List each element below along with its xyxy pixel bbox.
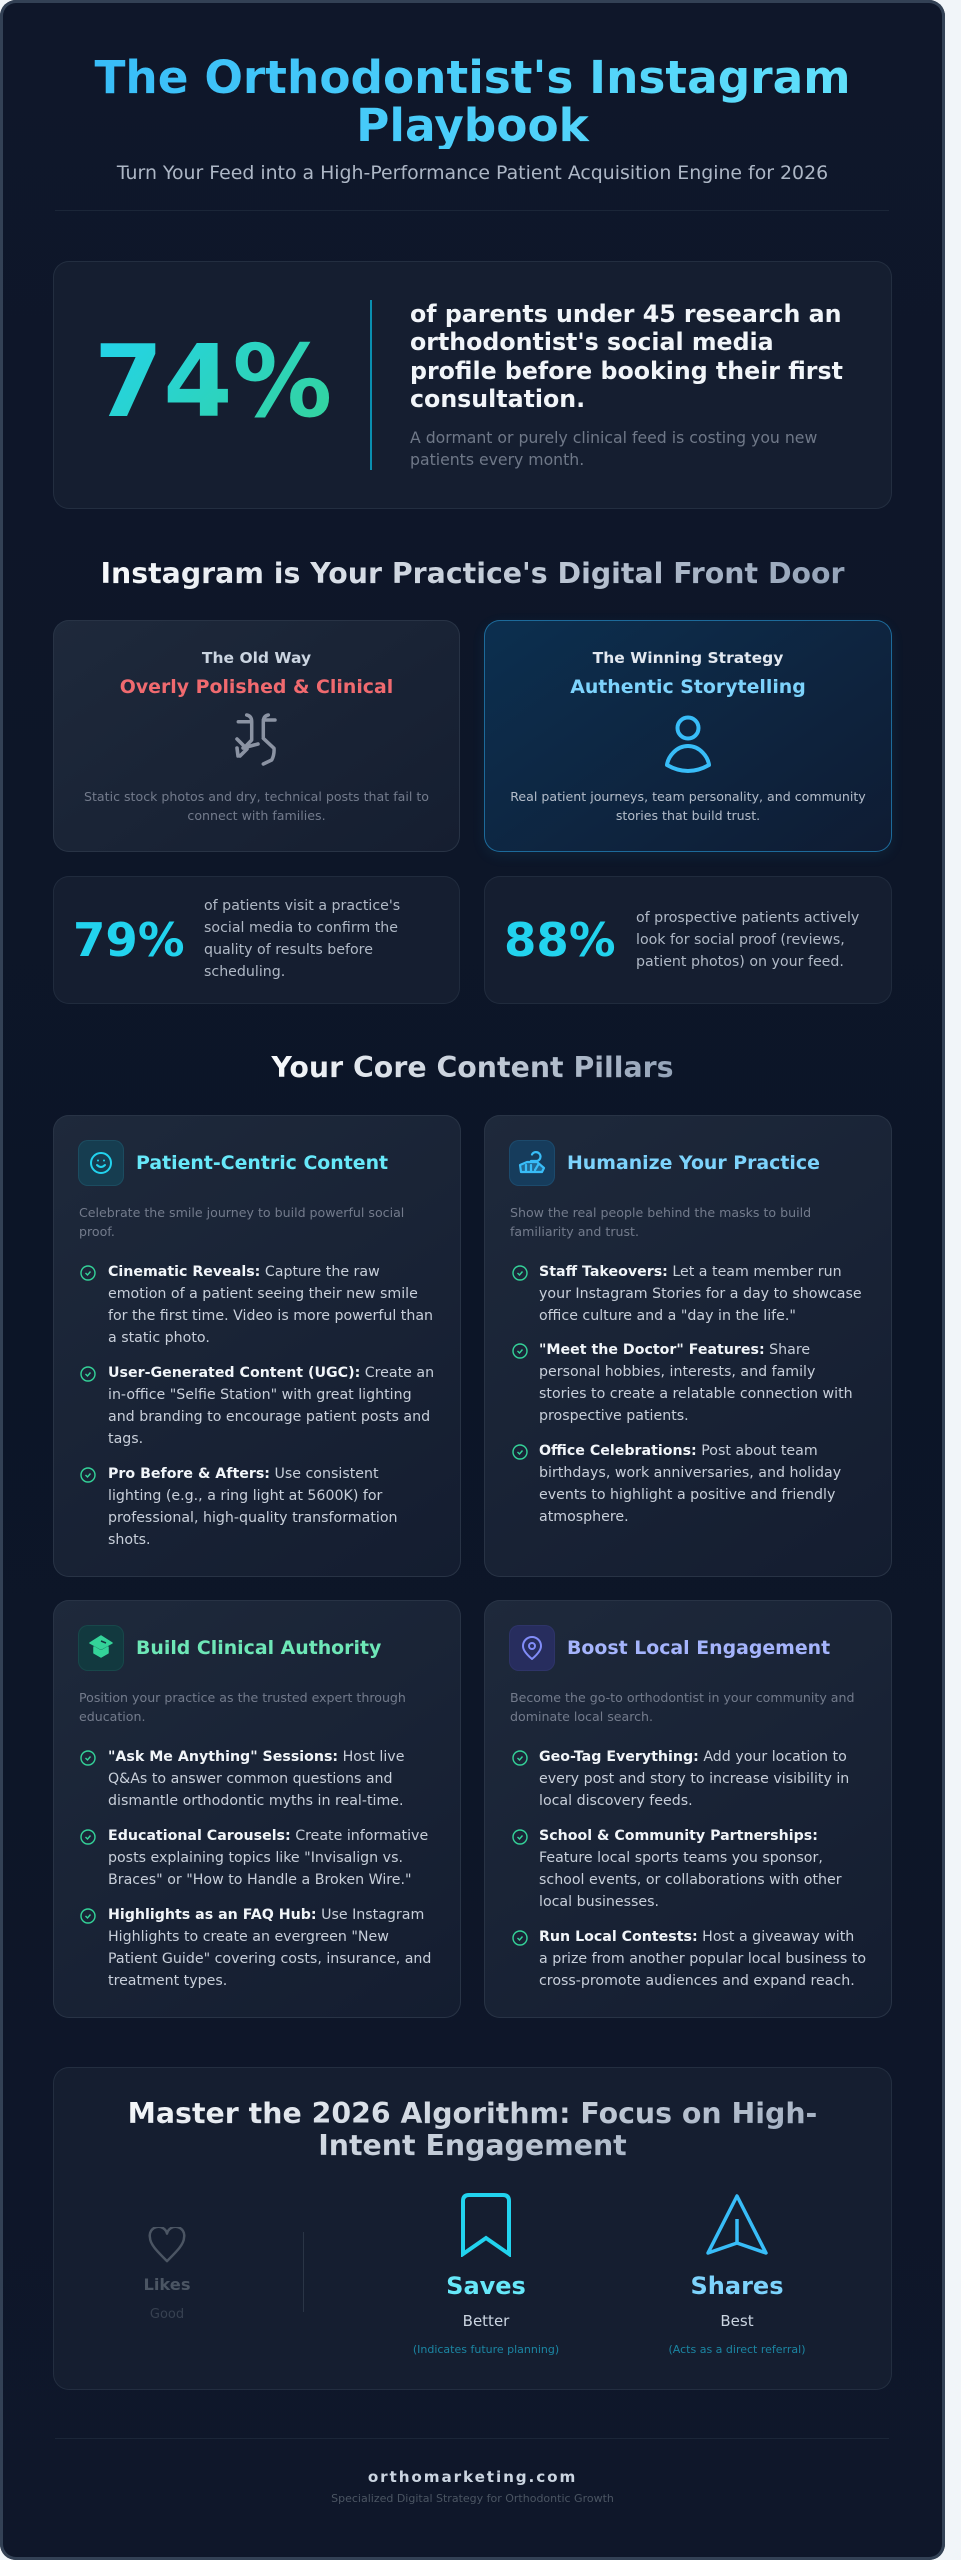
text: scheduling. <box>204 964 285 980</box>
description: Static stock photos and dry, technical posts that fail to <box>84 789 429 804</box>
pillar description: dominate local search. <box>510 1709 653 1724</box>
likes label: Likes <box>143 2275 191 2294</box>
panel: algorithm <box>53 2067 892 2390</box>
pillar title: Humanize Your Practice <box>567 1152 820 1174</box>
text: of patients visit a practice's <box>204 898 400 914</box>
title: The Orthodontist's Instagram <box>94 51 851 104</box>
subtitle: Turn Your Feed into a High-Performance Patient Acquisition Engine for 2026 <box>117 162 828 184</box>
hero statement: consultation. <box>410 385 585 413</box>
pillar description: familiarity and trust. <box>510 1224 639 1239</box>
item: carousels: Educational Carousels: Create informative <box>108 1828 428 1844</box>
pillar description: education. <box>79 1709 146 1724</box>
pillar description: Celebrate the smile journey to build powerful social <box>79 1205 404 1220</box>
item: highlights <box>108 1907 431 1989</box>
panel: stat 88% <box>484 876 892 1004</box>
icon: bookmark <box>461 2193 511 2257</box>
description: connect with families. <box>187 808 326 823</box>
icon: paper plane <box>706 2193 768 2257</box>
hero statement: of parents under 45 research an <box>410 300 842 328</box>
icon: map pin <box>509 1625 555 1671</box>
item: staff takeovers <box>539 1264 862 1324</box>
text <box>204 898 400 980</box>
text: of prospective patients actively <box>636 910 859 926</box>
icon: graduation cap <box>78 1625 124 1671</box>
hero note <box>410 428 817 469</box>
icon: heart <box>148 2227 186 2263</box>
big number 74%: 74% <box>94 325 332 440</box>
item: partnerships: Feature local sports teams you sponsor, <box>539 1850 823 1866</box>
check icon <box>80 1908 96 1924</box>
footer <box>0 2438 945 2528</box>
item: staff takeovers: your Instagram Stories for a day to showcase <box>539 1286 862 1302</box>
item: meet the doctor <box>539 1342 853 1424</box>
item: office celebrations: birthdays, work anniversaries, and holiday <box>539 1465 841 1481</box>
check icon <box>512 1343 528 1359</box>
item: UGC <box>108 1365 434 1447</box>
item: highlights: Highlights to create an evergreen "New <box>108 1929 389 1945</box>
item: geo-tag <box>539 1749 849 1809</box>
item: office celebrations: Office Celebrations: Post about team <box>539 1443 818 1459</box>
check icon <box>512 1265 528 1281</box>
check icon <box>512 1750 528 1766</box>
hero statement: orthodontist's social media <box>410 328 774 356</box>
item: office celebrations: atmosphere. <box>539 1509 629 1525</box>
item: AMA sessions: "Ask Me Anything" Sessions: Host live <box>108 1749 404 1765</box>
text: social media to confirm the <box>204 920 398 936</box>
saves rank: Better <box>463 2312 509 2330</box>
item: partnerships: school events, or collaborations with other <box>539 1872 842 1888</box>
item: contests: cross-promote audiences and expand reach. <box>539 1973 855 1989</box>
panel: stat 79% <box>53 876 460 1004</box>
item: before and afters: shots. <box>108 1532 151 1548</box>
number: 79% <box>73 913 185 967</box>
item: geo-tag: Geo-Tag Everything: Add your location to <box>539 1749 847 1765</box>
title <box>94 51 851 152</box>
description: stories that build trust. <box>616 808 760 823</box>
panel: build clinical authority <box>53 1600 461 2018</box>
item: highlights: treatment types. <box>108 1973 227 1989</box>
pillar description: Become the go-to orthodontist in your community and <box>510 1690 854 1705</box>
check icon <box>80 1829 96 1845</box>
check icon <box>512 1829 528 1845</box>
pillar description: Show the real people behind the masks to build <box>510 1205 811 1220</box>
saves label: Saves <box>446 2272 526 2300</box>
check icon <box>80 1750 96 1766</box>
label: The Winning Strategy <box>593 649 783 667</box>
item: UGC: User-Generated Content (UGC): Create an <box>108 1365 434 1381</box>
algorithm heading: Intent Engagement <box>318 2129 627 2162</box>
description: Real patient journeys, team personality, and community <box>510 789 866 804</box>
shares label: Shares <box>691 2272 783 2300</box>
footer brand: orthomarketing.com <box>368 2468 577 2486</box>
pillar description <box>79 1205 404 1239</box>
icon: broken smile <box>235 713 277 766</box>
item: carousels: posts explaining topics like "Invisalign vs. <box>108 1850 403 1866</box>
pillar description: Position your practice as the trusted expert through <box>79 1690 406 1705</box>
item: highlights: Patient Guide" covering costs, insurance, and <box>108 1951 431 1967</box>
item: AMA sessions <box>108 1749 404 1809</box>
description <box>510 789 866 823</box>
description <box>84 789 429 823</box>
header <box>55 51 889 211</box>
saves note: (Indicates future planning) <box>413 2343 559 2356</box>
pillar description: proof. <box>79 1224 115 1239</box>
item: meet the doctor: prospective patients. <box>539 1408 689 1424</box>
item: cinematic reveals <box>108 1264 433 1346</box>
item: UGC: and branding to encourage patient posts and <box>108 1409 430 1425</box>
check icon <box>80 1265 96 1281</box>
item: carousels: Braces" or "How to Handle a Broken Wire." <box>108 1872 412 1888</box>
number: 88% <box>504 913 616 967</box>
item: partnerships: School & Community Partnerships: <box>539 1828 818 1844</box>
pillar title: Patient-Centric Content <box>136 1152 388 1174</box>
check icon <box>80 1467 96 1483</box>
item: carousels <box>108 1828 428 1888</box>
pillar description <box>510 1690 854 1724</box>
item: contests: Run Local Contests: Host a giveaway with <box>539 1929 854 1945</box>
column: shares <box>617 2192 857 2362</box>
hero note: A dormant or purely clinical feed is costing you new <box>410 428 817 447</box>
item: partnerships: local businesses. <box>539 1894 659 1910</box>
likes rank: Good <box>150 2307 184 2322</box>
algorithm heading <box>53 2098 892 2162</box>
label: The Old Way <box>202 649 311 667</box>
footer tagline: Specialized Digital Strategy for Orthodontic Growth <box>331 2492 614 2505</box>
item: cinematic reveals: a static photo. <box>108 1330 210 1346</box>
pillar title: Boost Local Engagement <box>567 1637 830 1659</box>
headline: Overly Polished & Clinical <box>120 676 393 698</box>
pillar title: Build Clinical Authority <box>136 1637 381 1659</box>
item: cinematic reveals: for the first time. Video is more powerful than <box>108 1308 433 1324</box>
column: saves <box>366 2192 606 2362</box>
check icon <box>512 1930 528 1946</box>
title: Playbook <box>356 98 589 152</box>
item: office celebrations <box>539 1443 841 1525</box>
item: before and afters: Pro Before & Afters: Use consistent <box>108 1466 379 1482</box>
panel: patient-centric content <box>53 1115 461 1577</box>
text: look for social proof (reviews, <box>636 932 845 948</box>
item: staff takeovers: office culture and a "day in the life." <box>539 1308 796 1324</box>
panel: boost local engagement <box>484 1600 892 2018</box>
item: cinematic reveals: Cinematic Reveals: Capture the raw <box>108 1264 380 1280</box>
item: UGC: in-office "Selfie Station" with great lighting <box>108 1387 412 1403</box>
pillar description <box>79 1690 406 1724</box>
item: contests <box>539 1926 866 1992</box>
item: UGC: tags. <box>108 1431 143 1447</box>
icon: helping hand <box>509 1140 555 1186</box>
column: likes <box>87 2222 247 2332</box>
item: staff takeovers: Staff Takeovers: Let a team member run <box>539 1264 842 1280</box>
item: office celebrations: events to highlight a positive and friendly <box>539 1487 835 1503</box>
item: AMA sessions: dismantle orthodontic myths in real-time. <box>108 1793 404 1809</box>
shares rank: Best <box>720 2312 754 2330</box>
item: cinematic reveals: emotion of a patient seeing their new smile <box>108 1286 418 1302</box>
heading: digital front door: Instagram is Your Practice's Digital Front Door <box>100 557 845 590</box>
text: patient photos) on your feed. <box>636 954 844 970</box>
algorithm heading: Master the 2026 Algorithm: Focus on High- <box>128 2097 817 2130</box>
item: before and afters <box>108 1466 398 1548</box>
icon: person <box>665 716 711 773</box>
item: contests: a prize from another popular local business to <box>539 1951 866 1967</box>
check icon <box>80 1366 96 1382</box>
item: AMA sessions: Q&As to answer common questions and <box>108 1771 393 1787</box>
headline: Authentic Storytelling <box>570 676 806 698</box>
item: meet the doctor: personal hobbies, interests, and family <box>539 1364 815 1380</box>
panel: the winning strategy <box>484 620 892 852</box>
panel: humanize your practice <box>484 1115 892 1577</box>
pillar description <box>510 1205 811 1239</box>
text: quality of results before <box>204 942 373 958</box>
hero statement <box>410 300 843 413</box>
item: geo-tag: every post and story to increase visibility in <box>539 1771 849 1787</box>
item: before and afters: lighting (e.g., a ring light at 5600K) for <box>108 1488 382 1504</box>
icon: smile <box>78 1140 124 1186</box>
item: meet the doctor: stories to create a relatable connection with <box>539 1386 853 1402</box>
shares note: (Acts as a direct referral) <box>668 2343 806 2356</box>
check icon <box>512 1444 528 1460</box>
item: geo-tag: local discovery feeds. <box>539 1793 693 1809</box>
hero note: patients every month. <box>410 450 584 469</box>
heading: core content pillars: Your Core Content Pillars <box>271 1051 674 1084</box>
text <box>636 910 859 970</box>
hero statement: profile before booking their first <box>410 357 843 385</box>
item: highlights: Highlights as an FAQ Hub: Use Instagram <box>108 1907 424 1923</box>
item: meet the doctor: "Meet the Doctor" Features: Share <box>539 1342 810 1358</box>
item: partnerships <box>539 1828 842 1910</box>
panel: hero statistic <box>53 261 892 509</box>
item: before and afters: professional, high-quality transformation <box>108 1510 398 1526</box>
panel: the old way <box>53 620 460 852</box>
